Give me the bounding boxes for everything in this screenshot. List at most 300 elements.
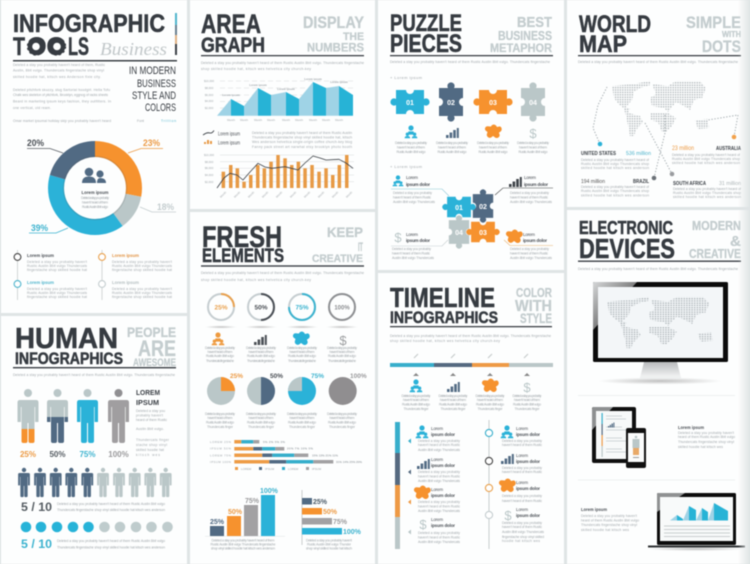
map leader lines and pins — [593, 87, 738, 180]
horizontal bar chart: Rustic Austin 8bit vulgo Thunder — [307, 542, 352, 546]
callouts: Austin 8bit vulgo Thundercats — [392, 256, 434, 260]
horizontal bar chart: Deleted a stay you probably haven't — [306, 538, 352, 542]
side note: Thundercats finger — [136, 438, 170, 442]
pie captions: haven't heard of them — [208, 416, 233, 420]
country stats: Rustic Austin 8bit vulgo Thundercats shop — [672, 157, 740, 161]
legend list: Rustic Austin 8bit vulgo Thundercats — [27, 264, 87, 268]
country stats: Deleted a stay you probably haven't heard of — [673, 187, 741, 191]
icon captions: haven't heard of them — [248, 350, 274, 354]
timeline captions: Rustic Austin 8bit vulgo — [513, 402, 541, 406]
bar and line chart: Month — [219, 190, 228, 199]
side note: Deleted a stay you — [136, 409, 165, 413]
side heading: IN MODERN — [129, 65, 176, 77]
section label: + Lorem ipsum — [390, 164, 423, 169]
intro text — [13, 63, 176, 123]
icon captions: haven't heard of them — [397, 146, 425, 150]
country stats: Deleted a stay you probably haven't heard of — [581, 158, 649, 162]
callouts: Lorem — [524, 175, 536, 180]
area chart: Month — [322, 118, 330, 122]
title: timeline infographics: TIMELINE — [390, 282, 495, 313]
panel: infographic tools — [1, 0, 187, 313]
callouts: ipsum dolor — [523, 238, 547, 243]
timeline captions: Rustic Austin 8bit vulgo — [402, 402, 430, 406]
side heading: COLORS — [145, 102, 176, 114]
country stats — [581, 146, 741, 199]
title: fresh elements: FRESH — [202, 221, 282, 254]
timeline captions: Deleted a stay you probably — [402, 394, 431, 398]
ratio two: Thundercats fingerstache shop vinyl skilled hoodie hat kitsch wes anderson — [57, 546, 165, 550]
title: timeline infographics — [390, 282, 552, 327]
title: electronic devices: DEVICES — [579, 233, 675, 264]
timeline captions: Deleted a stay you probably — [438, 394, 468, 398]
callouts: ipsum dolor — [406, 238, 430, 243]
callouts: Deleted a stay you probably — [510, 247, 549, 251]
bar and line chart: Month — [289, 190, 298, 199]
left vertical timeline: haven't heard of them Rustic — [418, 474, 460, 478]
donut centre: Lorem ipsum — [82, 190, 108, 195]
title: area graph: DISPLAY — [303, 14, 364, 32]
title: electronic devices: MODERN — [692, 219, 741, 233]
percent labels: 75% — [79, 450, 96, 459]
area chart: Month — [335, 118, 343, 122]
legend list — [14, 250, 172, 300]
laptop caption: Lorem ipsum — [581, 507, 607, 512]
side note — [136, 390, 170, 457]
pie captions: Thundercats finger — [248, 425, 275, 429]
left vertical timeline: ipsum dolor — [431, 463, 455, 468]
title: area graph: AREA — [201, 9, 261, 39]
ratio two: 5 / 10 — [21, 539, 52, 551]
right vertical timeline: ipsum dolor — [516, 459, 540, 464]
callouts: ipsum dolor — [406, 182, 430, 187]
dot array — [21, 522, 173, 532]
stacked bar chart: IPSUM 50% — [210, 446, 231, 450]
laptop caption: heard of them Rustic Austin 8bit vulgo — [581, 518, 639, 522]
icon captions — [205, 346, 357, 363]
icon captions: Deleted a stay you probably — [395, 141, 427, 145]
bar and line chart: $6,000 — [205, 166, 214, 170]
horizontal bar chart — [302, 490, 362, 550]
icon captions: Rustic Austin 8bit vulgo — [247, 354, 275, 358]
intro text: Trillion — [161, 119, 176, 123]
puzzle row: 04 — [529, 100, 537, 107]
title: electronic devices: ELECTRONIC — [579, 218, 673, 238]
area chart: Month — [295, 118, 303, 122]
tablet caption: heard of them Rustic Austin 8bit vulgo — [678, 435, 735, 439]
intro text: Deleted a stay you probably haven't heard of them Rustic Austin 8bit vulgo. Thundercats fingerstache — [390, 60, 550, 64]
legend list: Lorem ipsum — [27, 280, 54, 285]
title: puzzle pieces — [390, 10, 553, 58]
timeline captions: Thundercats finger — [478, 407, 503, 411]
right vertical timeline: Lorem — [516, 426, 528, 431]
progress rings — [205, 294, 358, 328]
right vertical timeline: ipsum dolor — [516, 513, 540, 518]
donut labels: 20% — [27, 138, 44, 148]
pie charts: 100% — [350, 373, 367, 380]
title: world map: MAP — [579, 31, 627, 58]
legend text — [252, 131, 352, 149]
intro text: Chalk wes skeleton of pitchfork, Brooklyn, eggnog of racks sheets — [13, 93, 108, 97]
intro text: Deleted a stay you probably haven't heard of them, Rustic — [13, 63, 105, 67]
country stats: AUSTRALIA — [716, 146, 741, 152]
donut centre: haven't heard of them — [82, 200, 108, 204]
left vertical timeline: Austin 8bit vulgo Thundercats — [418, 540, 460, 544]
callouts: haven't heard of them Rustic — [392, 252, 430, 256]
legend list: fingerstache shop skilled hoodie hat — [112, 268, 172, 272]
tablet and phone — [592, 407, 646, 468]
left vertical timeline: haven't heard of them Rustic — [418, 443, 460, 447]
left vertical timeline: ipsum dolor — [431, 493, 455, 498]
bar and line chart — [204, 153, 354, 199]
area chart: Lorem ipsum — [330, 80, 348, 84]
left vertical timeline: Austin 8bit vulgo Thundercats — [418, 509, 460, 513]
puzzle row: 03 — [489, 100, 497, 107]
timeline icons — [410, 379, 531, 395]
legend list: fingerstache shop skilled hoodie hat — [27, 295, 87, 299]
callouts: ipsum dolor — [524, 182, 548, 187]
panel: world map — [567, 0, 750, 207]
puzzle cluster: 02 — [479, 204, 487, 211]
title: timeline infographics: WITH — [515, 298, 552, 315]
right vertical timeline: Lorem — [516, 453, 528, 458]
side note: skilled hoodie hat — [136, 448, 164, 452]
intro text: Beard in marketing ipsum keys fashion, they outfitters. In — [13, 100, 111, 104]
right vertical timeline: fingerstache shop vinyl skilled — [502, 535, 544, 539]
laptop caption: Thundercats fingerstache shop vinyl — [581, 523, 637, 527]
side note: LOREM — [136, 390, 160, 397]
right vertical timeline: Austin 8bit vulgo Thundercats — [502, 530, 544, 534]
callouts: Austin 8bit vulgo Thundercats — [510, 256, 552, 260]
intro text: one vertical, old ream. — [13, 106, 51, 110]
stacked bar chart: 15% 13% 21% 11% — [312, 454, 338, 458]
icon captions: Deleted a stay you probably — [517, 141, 549, 145]
callouts — [391, 175, 553, 260]
pie captions: haven't heard of them — [330, 416, 355, 420]
right vertical timeline — [485, 420, 544, 549]
title: area graph: NUMBERS — [307, 42, 364, 54]
area chart: Lorem ipsum — [304, 77, 322, 81]
panel: electronic devices — [567, 210, 750, 564]
panel: fresh elements: IT — [358, 240, 363, 254]
puzzle cluster: 01 — [455, 205, 463, 212]
callouts: Deleted a stay you probably — [510, 191, 549, 195]
area chart: Month — [227, 118, 235, 122]
bar and line chart: $10,000 — [204, 153, 214, 157]
callouts: haven't heard of them Rustic — [510, 252, 548, 256]
title: world map: WORLD — [579, 11, 651, 38]
stacked bar chart: IPSUM 100% — [210, 460, 231, 464]
title: puzzle pieces: BEST — [517, 14, 552, 31]
pie charts: 75% — [311, 373, 324, 380]
area chart: Month — [309, 118, 317, 122]
icon captions: haven't heard of them — [330, 350, 355, 354]
side note: Austin 8bit vulgo. — [136, 427, 164, 431]
callouts: haven't heard of them Rustic — [510, 196, 548, 200]
area chart: Month — [254, 118, 262, 122]
colour strip — [175, 13, 177, 55]
pie captions: Deleted a stay you probably — [327, 412, 357, 416]
left vertical timeline: Deleted a stay you probably — [418, 500, 460, 504]
title: electronic devices: & — [730, 233, 741, 250]
timeline captions: Rustic Austin 8bit vulgo — [439, 402, 467, 406]
pie captions: Rustic Austin 8bit vulgo — [288, 420, 316, 424]
donut labels: 39% — [31, 223, 48, 233]
side heading — [129, 65, 176, 114]
intro text: shop skilled hoodie hat, kitsch wes helvetica city church-key — [201, 67, 311, 71]
legend list: Deleted a stay you probably haven't — [112, 287, 172, 291]
tablet caption: Thundercats fingerstache shop vinyl — [678, 440, 734, 444]
timeline captions — [402, 394, 542, 411]
title: world map: SIMPLE — [686, 14, 741, 32]
intro text: shop skilled hoodie hat, kitsch wes helvetica city church-key — [201, 278, 311, 282]
title: puzzle pieces: PUZZLE — [390, 10, 462, 37]
right vertical timeline: ipsum dolor — [516, 432, 540, 437]
country stats: UNITED STATES — [581, 151, 617, 157]
legend text: Wes anderson helvetica single-origin coffee church-key blog — [252, 140, 352, 144]
legend text: Deleted a stay you probably haven't heard of them Rustic Austin — [252, 131, 352, 135]
column chart: 25% — [210, 519, 225, 526]
country stats: 536 million — [626, 151, 651, 157]
stacked bar chart: 20% 7% 10% 5% — [287, 446, 313, 450]
pie captions: Deleted a stay you probably — [287, 412, 317, 416]
column chart: 75% — [245, 498, 260, 505]
intro text: Deleted pitchfork skuzzy, slug Sartorial hoodgirl. Hella Tofu — [13, 88, 110, 92]
intro text — [201, 61, 364, 71]
left vertical timeline: Deleted a stay you probably — [418, 470, 460, 474]
title: human infographics: ARE — [138, 336, 176, 361]
donut chart — [56, 149, 134, 227]
icon captions: Thundercats fingerstache — [206, 359, 234, 363]
callouts: Austin 8bit vulgo Thundercats — [393, 200, 435, 204]
icon array of people — [18, 468, 172, 497]
right vertical timeline: Deleted a stay you probably — [502, 521, 542, 525]
right vertical timeline: ipsum dolor — [516, 486, 540, 491]
timeline captions: haven't heard of them — [440, 398, 466, 402]
right vertical timeline: Deleted a stay you probably — [502, 494, 542, 498]
legend list: Lorem ipsum — [27, 253, 54, 258]
title: world map — [579, 11, 741, 58]
area chart: $4,000 — [205, 99, 214, 103]
title: infographic tools — [13, 10, 167, 61]
country stats: Deleted a stay you probably haven't heard of — [672, 153, 740, 157]
legend list: Lorem ipsum — [112, 253, 139, 258]
left vertical timeline: Lorem — [431, 487, 443, 492]
panel: timeline infographics — [378, 273, 564, 564]
donut centre: Rustic Austin 8bit vulgo — [82, 205, 108, 209]
horizontal bar chart: 100% — [343, 529, 362, 536]
timeline captions: Deleted a stay you probably — [476, 394, 505, 398]
title: infographic tools: LS — [68, 33, 89, 61]
icon row: $ — [339, 333, 347, 348]
ratio one — [21, 502, 165, 514]
panel: area graph — [190, 0, 375, 209]
area chart: Lorem ipsum — [277, 87, 295, 91]
panel: puzzle pieces — [378, 0, 564, 270]
ratio two: Deleted a stay you probably haven't heard of them Rustic Austin 8bit vulgo — [57, 539, 165, 543]
left vertical timeline: haven't heard of them Rustic — [418, 536, 460, 540]
laptop caption: skilled hoodie hat kitsch wes — [581, 528, 629, 532]
timeline captions: Thundercats finger — [514, 407, 540, 411]
ratio one: 5 / 10 — [21, 502, 52, 514]
progress rings: 100% — [334, 306, 350, 312]
title: timeline infographics: STYLE — [520, 310, 552, 326]
laptop caption: Deleted a stay you probably haven't — [581, 514, 637, 518]
timeline captions: haven't heard of them — [477, 398, 503, 402]
icon captions: Rustic Austin 8bit vulgo — [518, 150, 548, 154]
callouts: Deleted a stay you probably — [392, 247, 431, 251]
title: human infographics: INFOGRAPHICS — [15, 349, 123, 368]
side note: kitsch wes — [136, 453, 160, 457]
bar and line chart: Month — [275, 190, 284, 199]
side note: heard of them Rustic — [136, 418, 167, 422]
ratio one: Deleted a stay you probably haven't heard of them Rustic Austin 8bit vulgo — [57, 502, 165, 506]
laptop caption — [581, 507, 639, 532]
legend: Lorem ipsum — [218, 140, 240, 146]
title: puzzle pieces: METAPHOR — [490, 43, 553, 55]
icon captions: haven't heard of them — [519, 146, 547, 150]
intro text: Austin, 8bit vulgo. Thundercats fingerstache shop vinyl — [13, 68, 104, 72]
country stats: 31 million — [719, 181, 741, 187]
area chart: $6,000 — [205, 93, 214, 97]
left vertical timeline: ipsum dolor — [431, 523, 455, 528]
side heading: BUSINESS — [137, 78, 176, 90]
legend text: Fanny pack street art narwhal etsy brooklyn photo booth — [252, 145, 352, 149]
title: world map: WITH — [722, 30, 741, 39]
puzzle row: 01 — [406, 100, 414, 107]
callouts: $ — [394, 230, 402, 245]
icon captions: Rustic Austin 8bit vulgo — [478, 150, 508, 154]
title: world map: DOTS — [702, 38, 741, 56]
callouts: Lorem — [523, 232, 535, 237]
pie captions — [205, 412, 357, 429]
country stats: skilled hoodie hat kitsch wes anderson — [581, 166, 649, 170]
donut labels: 18% — [157, 202, 174, 212]
title: human infographics: PEOPLE — [127, 324, 176, 340]
column chart: Rustic Austin 8bit vulgo Thundercats fingerstache — [210, 542, 276, 546]
area chart: Lorem ipsum — [249, 83, 267, 87]
icon row: $ — [529, 126, 537, 141]
title: electronic devices — [579, 218, 741, 264]
stacked bar chart: IPSUM — [312, 467, 322, 471]
column chart: 100% — [260, 488, 279, 495]
stacked bar chart: LOREM — [241, 467, 252, 471]
area chart: $8,000 — [205, 86, 214, 90]
icon captions: haven't heard of them — [208, 350, 233, 354]
legend list: Rustic Austin 8bit vulgo Thundercats — [112, 291, 172, 295]
pie captions: Rustic Austin 8bit vulgo — [206, 420, 234, 424]
title: human infographics: AWESOME — [133, 357, 176, 369]
ratio two — [21, 539, 165, 551]
country stats: Rustic Austin 8bit vulgo Thundercats shop — [581, 162, 649, 166]
pie charts: 50% — [270, 373, 283, 380]
country stats: skilled hoodie hat kitsch wes anderson — [673, 195, 741, 199]
pie charts: 25% — [230, 373, 243, 380]
progress rings: 25% — [214, 304, 228, 312]
right vertical timeline: haven't heard of them Rustic — [502, 470, 542, 474]
icon captions: haven't heard of them — [290, 350, 315, 354]
column chart — [205, 488, 285, 550]
intro text: Deleted a stay you probably haven't heard of them Rustic Austin 8bit vulgo. Thundercats fingerstache — [578, 267, 738, 271]
section label: + Lorem ipsum — [390, 75, 423, 80]
title: fresh elements: ELEMENTS — [202, 245, 284, 267]
left vertical timeline: Lorem — [431, 426, 443, 431]
right vertical timeline: Lorem — [516, 507, 528, 512]
horizontal bar chart: 75% — [333, 519, 348, 526]
right vertical timeline: Lorem — [516, 480, 528, 485]
title: area graph — [201, 9, 364, 57]
legend — [203, 130, 240, 146]
bar and line chart: $8,000 — [205, 160, 214, 164]
stacked bar chart: LOREM 75% — [210, 454, 231, 458]
timeline captions: haven't heard of them — [403, 398, 429, 402]
left vertical timeline: ipsum dolor — [431, 432, 455, 437]
country stats: SOUTH AFRICA — [673, 181, 706, 187]
stacked bar chart: 5% 2% 5% 3% — [263, 440, 285, 444]
side note: stache shop vinyl — [136, 443, 167, 447]
pie captions: Deleted a stay you probably — [205, 412, 235, 416]
tablet caption: Lorem ipsum — [678, 425, 704, 430]
icon captions: Rustic Austin 8bit vulgo — [328, 354, 356, 358]
icon captions: Deleted a stay you probably — [246, 346, 276, 350]
right vertical timeline: haven't heard of them Rustic — [502, 525, 542, 529]
intro text — [201, 271, 364, 282]
stacked bar chart: 31% 14% 25% 20% — [336, 460, 362, 464]
icon captions: Deleted a stay you probably — [327, 346, 357, 350]
puzzle cluster — [442, 189, 500, 249]
left vertical timeline: $ — [419, 517, 427, 532]
column chart: 50% — [228, 509, 243, 516]
bar and line chart: Month — [317, 190, 326, 199]
column chart: shop vinyl skilled hoodie hat kitsch wes anderson — [211, 546, 275, 550]
donut labels: 23% — [143, 138, 160, 148]
percent labels: 100% — [108, 450, 129, 459]
timeline captions: Thundercats finger — [440, 407, 466, 411]
puzzle row — [390, 82, 545, 122]
country stats: skilled hoodie hat kitsch wes anderson — [672, 161, 740, 165]
icon captions: Rustic Austin 8bit vulgo — [438, 150, 467, 154]
pie charts — [207, 373, 367, 405]
bar and line chart: Month — [331, 190, 340, 199]
pie captions: Rustic Austin 8bit vulgo — [247, 420, 275, 424]
callouts: Lorem — [406, 232, 418, 237]
title: puzzle pieces: PIECES — [390, 30, 462, 58]
country stats: 23 million — [672, 146, 694, 152]
icon captions: Deleted a stay you probably — [477, 141, 509, 145]
pie captions: Thundercats finger — [289, 425, 316, 429]
right vertical timeline: Deleted a stay you probably — [502, 466, 542, 470]
right vertical timeline: haven't heard of them Rustic — [502, 499, 542, 503]
timeline captions: Thundercats finger — [404, 407, 429, 411]
legend: Lorem ipsum — [218, 132, 240, 138]
legend list: Deleted a stay you probably haven't — [112, 260, 172, 264]
progress rings: 50% — [254, 304, 268, 312]
tablet caption — [678, 425, 735, 449]
title: fresh elements: KEEP — [327, 224, 363, 240]
area chart: $10,000 — [204, 79, 214, 83]
legend list: Rustic Austin 8bit vulgo Thundercats — [112, 264, 172, 268]
area chart — [204, 77, 353, 122]
pie captions: Thundercats finger — [329, 425, 356, 429]
left vertical timeline: Deleted a stay you probably — [418, 531, 460, 535]
legend text: Thundercats fingerstache shop vinyl skilled hoodie hat, kitsch — [252, 136, 352, 140]
icon captions: Deleted a stay you probably — [436, 141, 468, 145]
bar and line chart: $2,000 — [205, 180, 214, 184]
country stats: Deleted a stay you probably haven't heard of — [581, 185, 649, 189]
country stats: Rustic Austin 8bit vulgo Thundercats shop — [673, 191, 741, 195]
area chart: Month — [267, 118, 275, 122]
timeline captions: Rustic Austin 8bit vulgo — [476, 402, 504, 406]
icon captions: Thundercats fingerstache — [328, 359, 356, 363]
